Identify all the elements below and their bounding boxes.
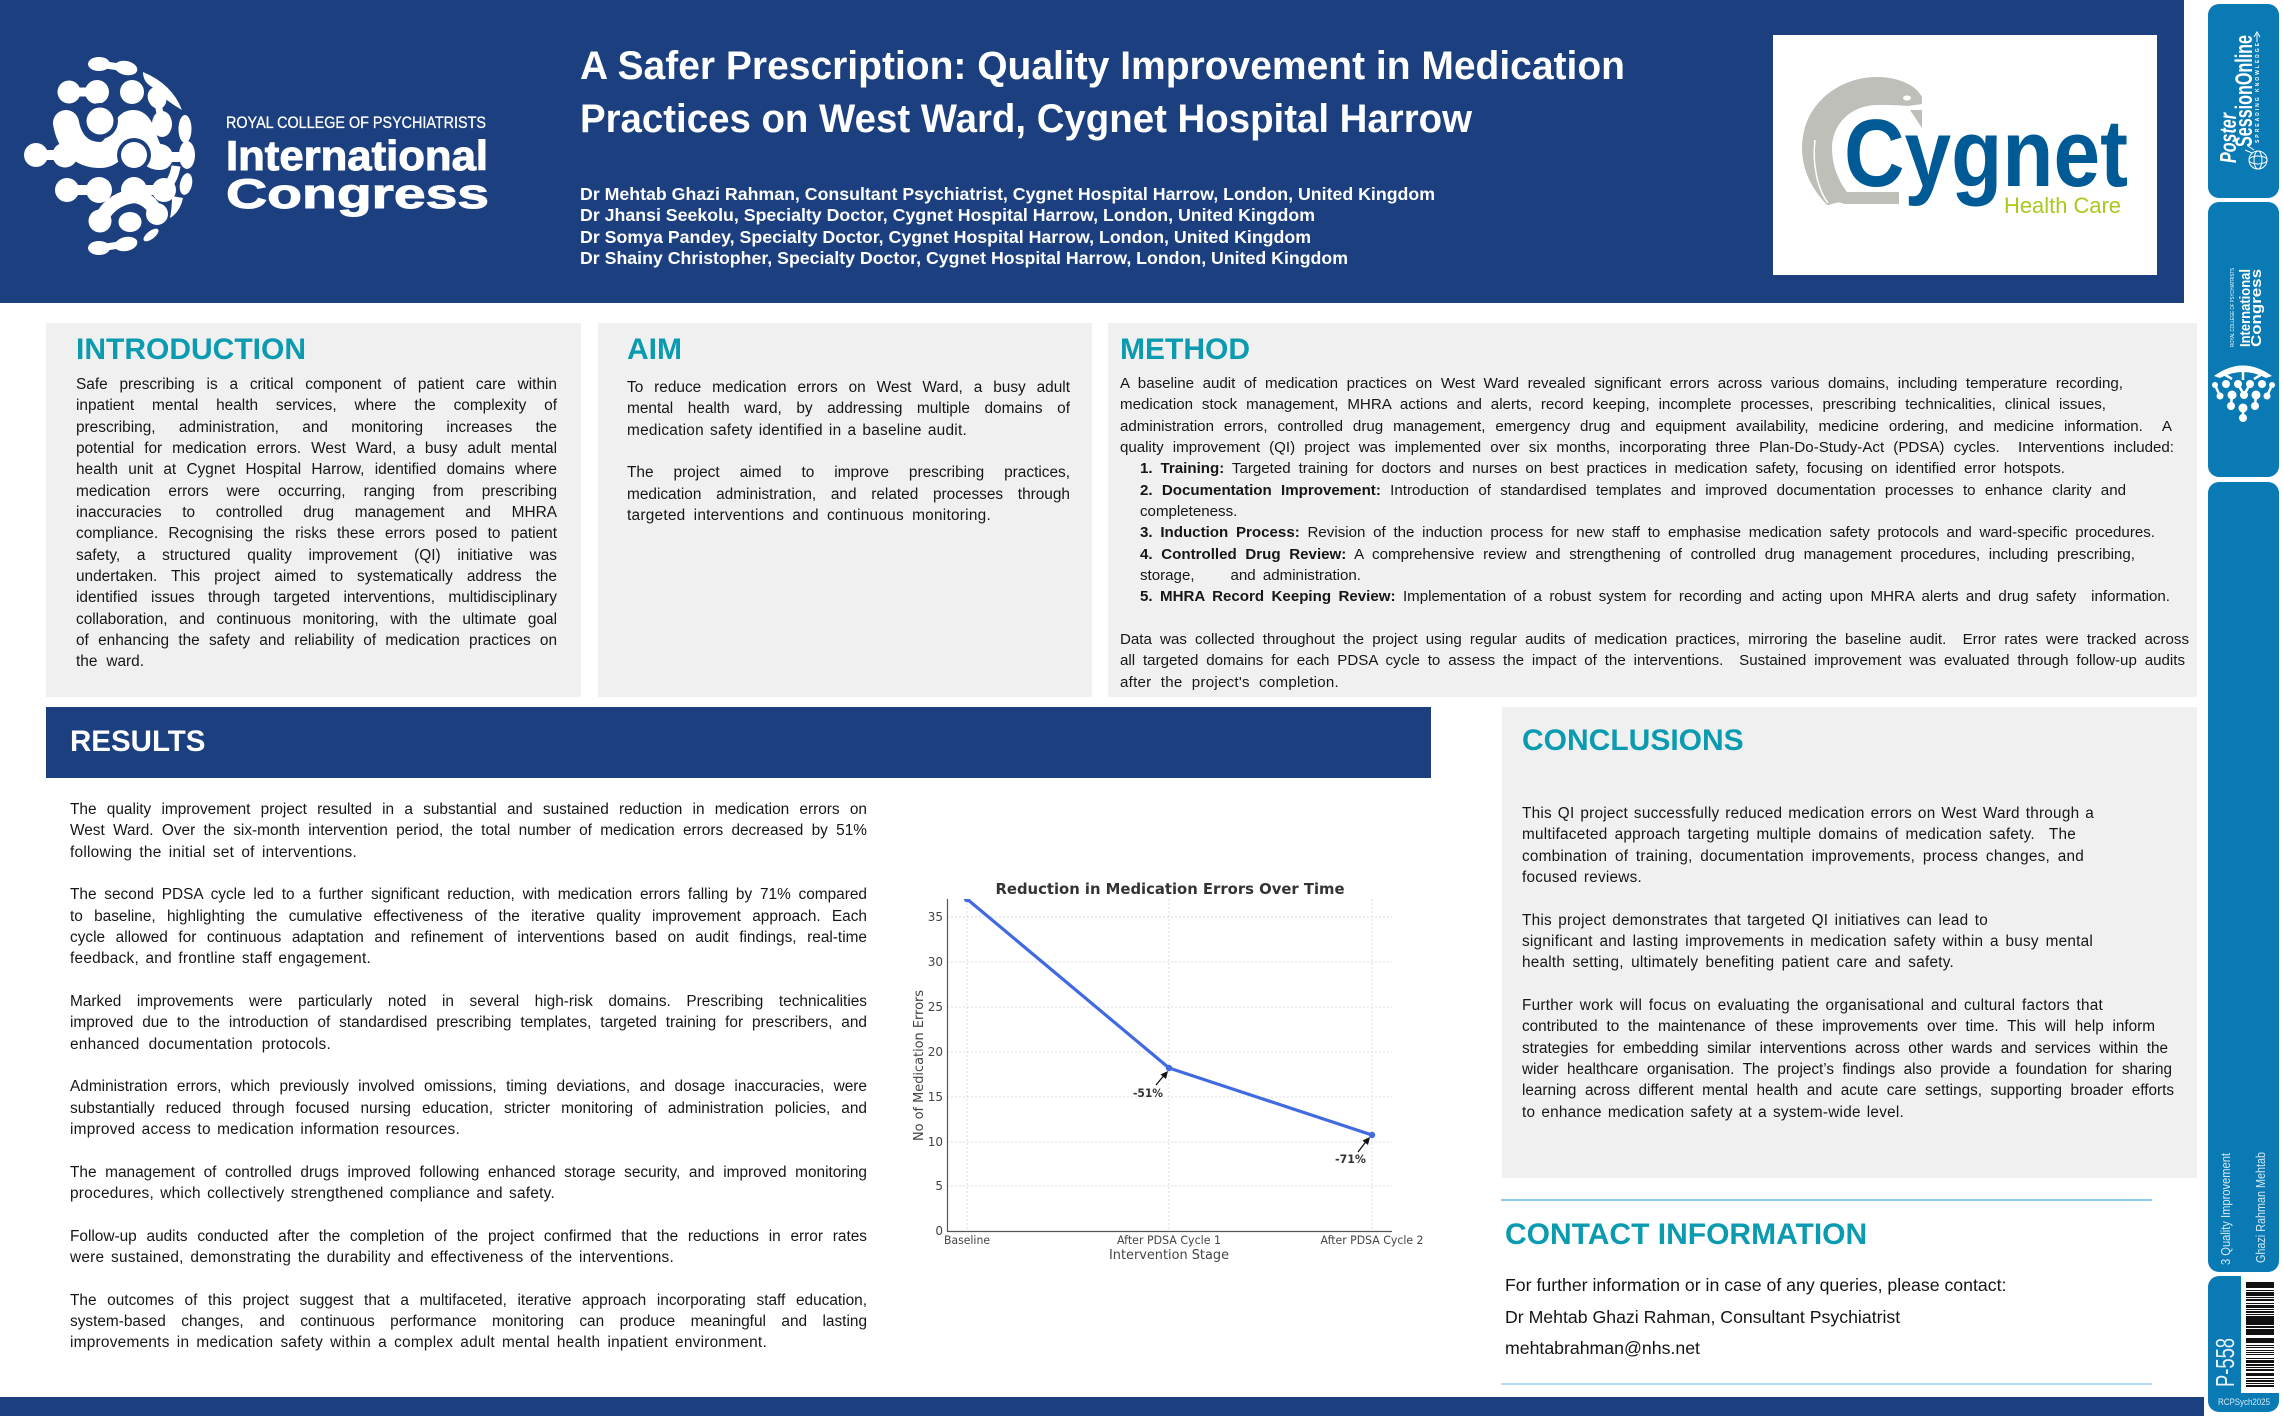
text block: introduction: inpatient mental health services, where the complexity of xyxy=(76,397,557,414)
panel: method xyxy=(1108,323,2197,697)
axes xyxy=(948,899,1392,1232)
barcode xyxy=(2246,1282,2274,1387)
text block: results: system-based changes, and continuous performance monitoring can produce meaningful and lasting xyxy=(70,1313,867,1330)
text: category and author xyxy=(2219,1152,2268,1265)
panel: introduction xyxy=(46,323,581,697)
text block: method: 3. Induction Process: Revision of the induction process for new staff to emphasise medication safety protocols and ward-specific procedures. xyxy=(1140,524,2155,541)
annotation: -71%: -71% xyxy=(1335,1152,1366,1166)
text block: results: The management of controlled drugs improved following enhanced storage security, and improved monitoring xyxy=(70,1164,867,1181)
panel: aim xyxy=(598,323,1092,697)
authors: Dr Jhansi Seekolu, Specialty Doctor, Cygnet Hospital Harrow, London, United Kingdom xyxy=(580,205,1315,225)
text block: aim: mental health ward, by addressing multiple domains of xyxy=(627,400,1070,417)
text block: introduction xyxy=(76,376,558,670)
y axis tick labels: 0 xyxy=(935,1224,943,1238)
text block: method xyxy=(1120,375,2189,691)
text block: results: procedures, which collectively strengthened compliance and safety. xyxy=(70,1185,555,1202)
text block: introduction: health unit at Cygnet Hospital Harrow, identified domains where xyxy=(76,461,557,478)
authors: Dr Shainy Christopher, Specialty Doctor, Cygnet Hospital Harrow, London, United Kingdom xyxy=(580,248,1348,268)
logo: RCPsych International Congress xyxy=(24,57,489,255)
text block: method: Data was collected throughout the project using regular audits of medication practices, mirroring the baseline audit. Error rates were tracked across xyxy=(1120,631,2189,648)
y axis tick labels xyxy=(928,910,943,1238)
text block: results: West Ward. Over the six-month intervention period, the total number of medication errors decreased by 51% xyxy=(70,822,867,839)
text block: aim: medication safety identified in a baseline audit. xyxy=(627,422,967,439)
x axis tick labels: After PDSA Cycle 2 xyxy=(1320,1233,1424,1247)
barcode background xyxy=(2241,1276,2279,1393)
authors xyxy=(580,184,1435,268)
text block: conclusions: contributed to the maintenance of these improvements over time. This will help inform xyxy=(1522,1018,2155,1035)
logo: International Congress small xyxy=(2212,267,2275,422)
text block: introduction: Safe prescribing is a critical component of patient care within xyxy=(76,376,557,393)
sidebar tab: poster number and barcode xyxy=(2208,1276,2279,1412)
title xyxy=(580,44,1625,141)
x axis label: Intervention Stage xyxy=(1109,1247,1229,1263)
y axis label: No of Medication Errors xyxy=(911,990,927,1141)
text block: conclusions: combination of training, documentation improvements, process changes, and xyxy=(1522,848,2084,865)
text block: results xyxy=(70,801,867,1351)
text block: method: storage, and administration. xyxy=(1140,567,1361,584)
text block: results: improved due to the introduction of standardised prescribing templates, targeted training for prescribers, and xyxy=(70,1014,867,1031)
footer band xyxy=(0,1397,2204,1416)
logo: International Congress small: Congress xyxy=(2248,269,2265,347)
text block: conclusions: multifaceted approach targeting multiple domains of medication safety. The xyxy=(1522,826,2076,843)
text block: method: after the project's completion. xyxy=(1120,674,1339,691)
text block: results: improved access to medication information resources. xyxy=(70,1121,460,1138)
text block: results: The second PDSA cycle led to a further significant reduction, with medication errors falling by 71% compared xyxy=(70,886,867,903)
logo wordmark: ROYAL COLLEGE OF PSYCHIATRISTS xyxy=(226,113,486,132)
y axis tick labels: 25 xyxy=(928,1000,943,1014)
text block: results: to baseline, highlighting the cumulative effectiveness of the iterative quality improvement approach. Each xyxy=(70,908,867,925)
sidebar tab: International Congress xyxy=(2208,202,2279,477)
text block: method: A baseline audit of medication practices on West Ward revealed significant errors across various domains, including temperature recording, xyxy=(1120,375,2123,392)
text block: results: substantially reduced through focused nursing education, stricter monitoring of administration policies, and xyxy=(70,1100,867,1117)
header band xyxy=(0,0,2184,303)
text block: aim: To reduce medication errors on West Ward, a busy adult xyxy=(627,379,1070,396)
y axis tick labels: 10 xyxy=(928,1135,943,1149)
logo wordmark: Health Care: Health Care xyxy=(2004,193,2121,218)
line chart: reduction in medication errors xyxy=(911,880,1424,1263)
text block: method: all targeted domains for each PDSA cycle to assess the impact of the interventions. Sustained improvement was evaluated through follow-up audits xyxy=(1120,652,2185,669)
x axis tick labels: After PDSA Cycle 1 xyxy=(1117,1233,1221,1247)
text block: results: Marked improvements were particularly noted in several high-risk domains. Prescribing technicalities xyxy=(70,993,867,1010)
text: conference code: RCPSych2025 xyxy=(2218,1397,2270,1407)
text block: introduction: medication errors were occurring, ranging from prescribing xyxy=(76,483,557,500)
text block: introduction: identified issues through targeted interventions, multidisciplinary xyxy=(76,589,557,606)
logo: Poster Session Online: Poster xyxy=(2215,112,2241,163)
y axis tick labels: 35 xyxy=(928,910,943,924)
text block: results: Follow-up audits conducted after the completion of the project confirmed that the reductions in error rates xyxy=(70,1228,867,1245)
text block: introduction: collaboration, and continuous monitoring, with the ultimate goal xyxy=(76,611,557,628)
text block: conclusions xyxy=(1522,805,2174,1121)
text block: conclusions: strategies for embedding similar interventions across other wards and services within the xyxy=(1522,1040,2168,1057)
logo: Poster Session Online: SPREADING KNOWLEDGE xyxy=(2255,42,2261,143)
text block: method: medication stock management, MHRA actions and alerts, record keeping, incomplete processes, prescribing technicalities, clinical issues, xyxy=(1120,396,2106,413)
text block: contact details: mehtabrahman@nhs.net xyxy=(1505,1338,1700,1358)
icon: molecular globe xyxy=(24,57,195,255)
text block: results: improvements in medication safety within a complex adult mental health inpatient environment. xyxy=(70,1334,767,1351)
text block: introduction: potential for medication errors. West Ward, a busy adult mental xyxy=(76,440,557,457)
text block: conclusions: Further work will focus on evaluating the organisational and cultural factors that xyxy=(1522,997,2103,1014)
sidebar tab: category and author xyxy=(2208,482,2279,1272)
logo: Poster Session Online xyxy=(2215,31,2268,170)
text block: method: 4. Controlled Drug Review: A comprehensive review and strengthening of controlled drug management procedures, including prescribing, xyxy=(1140,546,2135,563)
text: poster number: P-558 xyxy=(2210,1338,2240,1387)
heading bar: results xyxy=(46,707,1431,778)
text block: introduction: of enhancing the safety and reliability of medication practices on xyxy=(76,632,557,649)
text block: aim: targeted interventions and continuous monitoring. xyxy=(627,507,991,524)
logo: Cygnet Health Care xyxy=(1773,35,2157,275)
text block: aim xyxy=(627,379,1070,524)
y axis tick labels: 15 xyxy=(928,1090,943,1104)
text block: conclusions: This project demonstrates that targeted QI initiatives can lead to xyxy=(1522,912,1988,929)
logo wordmark: Congress xyxy=(226,170,489,217)
panel: contact information xyxy=(1501,1199,2152,1385)
text block: method: quality improvement (QI) project was implemented over six months, incorporating three Plan-Do-Study-Act (PDSA) cycles. Interventions included: xyxy=(1120,439,2174,456)
y axis tick labels: 5 xyxy=(935,1179,943,1193)
text block: method: 1. Training: Targeted training for doctors and nurses on best practices in medication safety, focusing on identified error hotspots. xyxy=(1140,460,2065,477)
text block: aim: The project aimed to improve prescribing practices, xyxy=(627,464,1070,481)
x axis tick labels: Baseline xyxy=(944,1233,990,1247)
panel: conclusions xyxy=(1502,707,2197,1178)
text block: conclusions: significant and lasting improvements in medication safety within a busy mental xyxy=(1522,933,2093,950)
text block: results: following the initial set of interventions. xyxy=(70,844,357,861)
text block: method: completeness. xyxy=(1140,503,1237,520)
y axis tick labels: 30 xyxy=(928,955,943,969)
text block: introduction: undertaken. This project aimed to systematically address the xyxy=(76,568,557,585)
text block: introduction: compliance. Recognising the risks these errors posed to patient xyxy=(76,525,557,542)
text block: conclusions: This QI project successfully reduced medication errors on West Ward through a xyxy=(1522,805,2094,822)
heading: method: METHOD xyxy=(1120,333,1250,366)
text block: conclusions: health setting, ultimately benefiting patient care and safety. xyxy=(1522,954,1954,971)
text block: contact details xyxy=(1505,1275,2006,1358)
text block: contact details: Dr Mehtab Ghazi Rahman, Consultant Psychiatrist xyxy=(1505,1306,1900,1326)
text block: contact details: For further information or in case of any queries, please contact: xyxy=(1505,1275,2006,1295)
logo: International Congress small: ROYAL COLLEGE OF PSYCHIATRISTS xyxy=(2230,267,2236,347)
text: category and author: Ghazi Rahman Mehtab xyxy=(2254,1152,2268,1263)
text block: results: enhanced documentation protocols. xyxy=(70,1036,331,1053)
icon: swan swoosh xyxy=(1802,77,1922,205)
annotation: -51%: -51% xyxy=(1133,1086,1163,1100)
annotation: -51% xyxy=(1133,1071,1168,1100)
annotation: -71% xyxy=(1335,1137,1370,1166)
heading: contact information: CONTACT INFORMATION xyxy=(1505,1218,1867,1251)
text block: method: 2. Documentation Improvement: Introduction of standardised templates and improved documentation processes to enhance clarity and xyxy=(1140,482,2126,499)
logo wordmark: Cygnet: Cygnet xyxy=(1844,100,2128,207)
text block: conclusions: wider healthcare organisation. The project’s findings also provide a foundation for sharing xyxy=(1522,1061,2172,1078)
logo wordmark: International xyxy=(226,132,488,179)
x axis tick labels xyxy=(944,1233,1424,1247)
y axis tick labels: 20 xyxy=(928,1045,943,1059)
heading: aim: AIM xyxy=(627,333,682,366)
text block: results: Administration errors, which previously involved omissions, timing deviations, and dosage inaccuracies, were xyxy=(70,1078,867,1095)
text block: results: cycle allowed for continuous adaptation and refinement of interventions based on audit findings, real-time xyxy=(70,929,867,946)
text block: aim: medication administration, and related processes through xyxy=(627,486,1070,503)
text block: method: administration errors, controlled drug management, emergency drug and equipment availability, medicine ordering, and medicine information. A xyxy=(1120,418,2172,435)
title: A Safer Prescription: Quality Improvement in Medication xyxy=(580,44,1625,88)
heading: results: RESULTS xyxy=(70,725,206,758)
data line xyxy=(964,896,1375,1138)
text block: conclusions: focused reviews. xyxy=(1522,869,1642,886)
title: Practices on West Ward, Cygnet Hospital Harrow xyxy=(580,97,1473,141)
text block: results: were sustained, demonstrating the durability and effectiveness of the interventions. xyxy=(70,1249,674,1266)
text block: results: The outcomes of this project suggest that a multifaceted, iterative approach incorporating staff education, xyxy=(70,1292,867,1309)
logo: International Congress small: International xyxy=(2237,269,2254,347)
text: category and author: 3 Quality Improvement xyxy=(2219,1153,2233,1265)
logo wordmark xyxy=(226,113,489,217)
authors: Dr Mehtab Ghazi Rahman, Consultant Psychiatrist, Cygnet Hospital Harrow, London, United Kingdom xyxy=(580,184,1435,204)
text block: results: The quality improvement project resulted in a substantial and sustained reduction in medication errors on xyxy=(70,801,867,818)
heading: introduction: INTRODUCTION xyxy=(76,333,306,366)
text block: introduction: the ward. xyxy=(76,653,144,670)
text block: method: 5. MHRA Record Keeping Review: Implementation of a robust system for recording and acting upon MHRA alerts and drug safety information. xyxy=(1140,588,2170,605)
text block: introduction: inaccuracies to controlled drug management and MHRA xyxy=(76,504,557,521)
text block: introduction: safety, a structured quality improvement (QI) initiative was xyxy=(76,547,557,564)
text block: conclusions: to enhance medication safety at a system-wide level. xyxy=(1522,1104,1904,1121)
text block: results: feedback, and frontline staff engagement. xyxy=(70,950,371,967)
text block: conclusions: learning across different mental health and acute care settings, supporting broader efforts xyxy=(1522,1082,2174,1099)
sidebar tab: Poster Session Online xyxy=(2208,4,2279,198)
heading: conclusions: CONCLUSIONS xyxy=(1522,724,1744,757)
text block: introduction: prescribing, administration, and monitoring increases the xyxy=(76,419,557,436)
chart title: Reduction in Medication Errors Over Time xyxy=(996,880,1344,898)
authors: Dr Somya Pandey, Specialty Doctor, Cygnet Hospital Harrow, London, United Kingdom xyxy=(580,227,1311,247)
